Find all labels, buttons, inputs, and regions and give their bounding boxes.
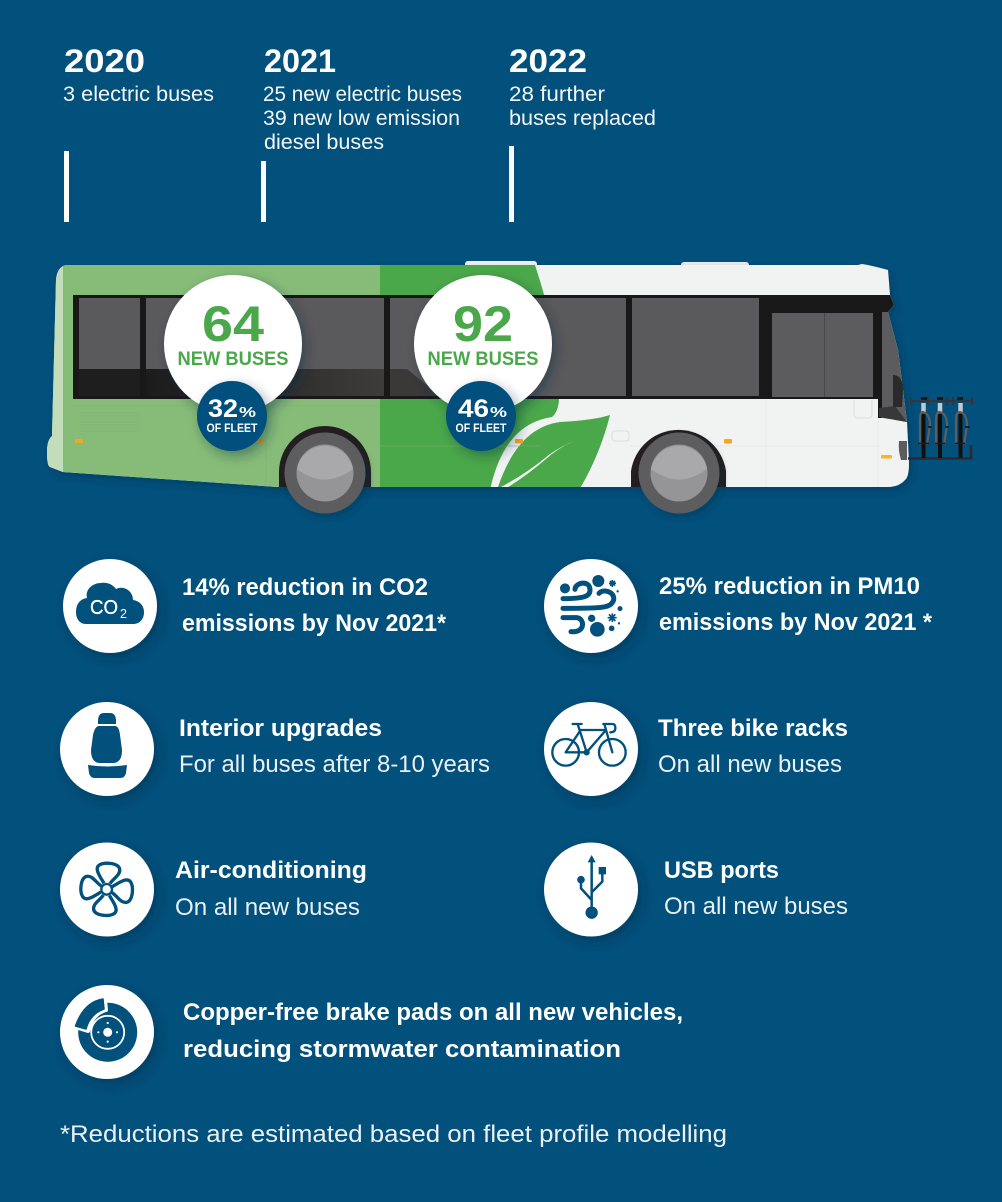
timeline: 2020: 3 electric buses — [63, 83, 214, 106]
timeline: 2022 — [509, 43, 656, 222]
callout: 32% of fleet: OF FLEET — [206, 423, 258, 435]
timeline: 2020 — [63, 43, 214, 222]
text: interior upgrades — [179, 715, 490, 778]
timeline: 2021: 2021 — [264, 43, 336, 79]
timeline: 2021 — [261, 43, 462, 222]
timeline: 2022: buses replaced — [509, 107, 656, 130]
callout: 64 new buses — [164, 275, 302, 413]
text: copper-free brake pads — [183, 999, 683, 1063]
footnote: *Reductions are estimated based on fleet profile modelling — [60, 1121, 727, 1148]
text: air-conditioning: On all new buses — [175, 894, 360, 921]
callout: 46% of fleet: OF FLEET — [456, 423, 506, 435]
text: CO2 reduction: emissions by Nov 2021* — [182, 610, 447, 637]
callout: 92 new buses: 92 — [453, 296, 513, 352]
callout: 92 new buses — [414, 275, 552, 413]
icon: bus seat — [60, 702, 154, 796]
text: air-conditioning: Air-conditioning — [175, 857, 367, 884]
windscreen and front — [878, 295, 894, 312]
callout: 32% of fleet — [197, 381, 267, 451]
callout: 92 new buses: NEW BUSES — [428, 348, 538, 370]
icon: particulate wind — [544, 559, 638, 653]
text: USB ports: USB ports — [664, 857, 779, 884]
icon: USB — [544, 842, 638, 936]
text: PM10 reduction: 25% reduction in PM10 — [659, 573, 920, 600]
text: USB ports — [664, 857, 848, 920]
text: bike racks: Three bike racks — [658, 715, 848, 742]
text: bike racks — [658, 715, 848, 778]
callout: 32% of fleet: % — [239, 404, 256, 421]
text: copper-free brake pads: reducing stormwater contamination — [183, 1036, 621, 1063]
icon: CO2 cloud — [63, 559, 157, 653]
text: CO2 reduction: 14% reduction in CO2 — [182, 574, 428, 601]
timeline: 2022: 28 further — [509, 83, 605, 106]
text: USB ports: On all new buses — [664, 893, 848, 920]
bike rack on bus front — [908, 397, 973, 458]
text: PM10 reduction: emissions by Nov 2021 * — [659, 609, 933, 636]
timeline: 2022: 2022 — [509, 43, 587, 79]
icon: bicycle — [544, 702, 638, 796]
windows — [73, 295, 881, 399]
callout: 32% of fleet: 32 — [208, 395, 238, 423]
wheels — [279, 426, 371, 487]
text: interior upgrades: Interior upgrades — [179, 715, 382, 742]
text: PM10 reduction — [659, 573, 933, 636]
timeline: 2021: diesel buses — [264, 131, 384, 154]
callout: 46% of fleet — [446, 381, 516, 451]
timeline: 2021: 39 new low emission — [263, 107, 460, 130]
timeline: 2021: 25 new electric buses — [263, 83, 462, 106]
icon: fan — [60, 842, 154, 936]
text: bike racks: On all new buses — [658, 751, 842, 778]
callout: 64 new buses: NEW BUSES — [178, 348, 288, 370]
icon: CO2 cloud: 2 — [120, 607, 127, 621]
callout: 46% of fleet: % — [490, 404, 507, 421]
callout: 64 new buses: 64 — [202, 296, 264, 352]
icon: brake disc — [60, 985, 154, 1079]
timeline: 2020: 2020 — [64, 43, 145, 79]
bus illustration — [40, 260, 909, 514]
text: CO2 reduction — [182, 574, 447, 637]
text: air-conditioning — [175, 857, 367, 921]
text: copper-free brake pads: Copper-free brake pads on all new vehicles, — [183, 999, 683, 1026]
callout: 46% of fleet: 46 — [458, 395, 489, 423]
text: interior upgrades: For all buses after 8-10 years — [179, 751, 490, 778]
icon: CO2 cloud: CO — [90, 596, 118, 619]
